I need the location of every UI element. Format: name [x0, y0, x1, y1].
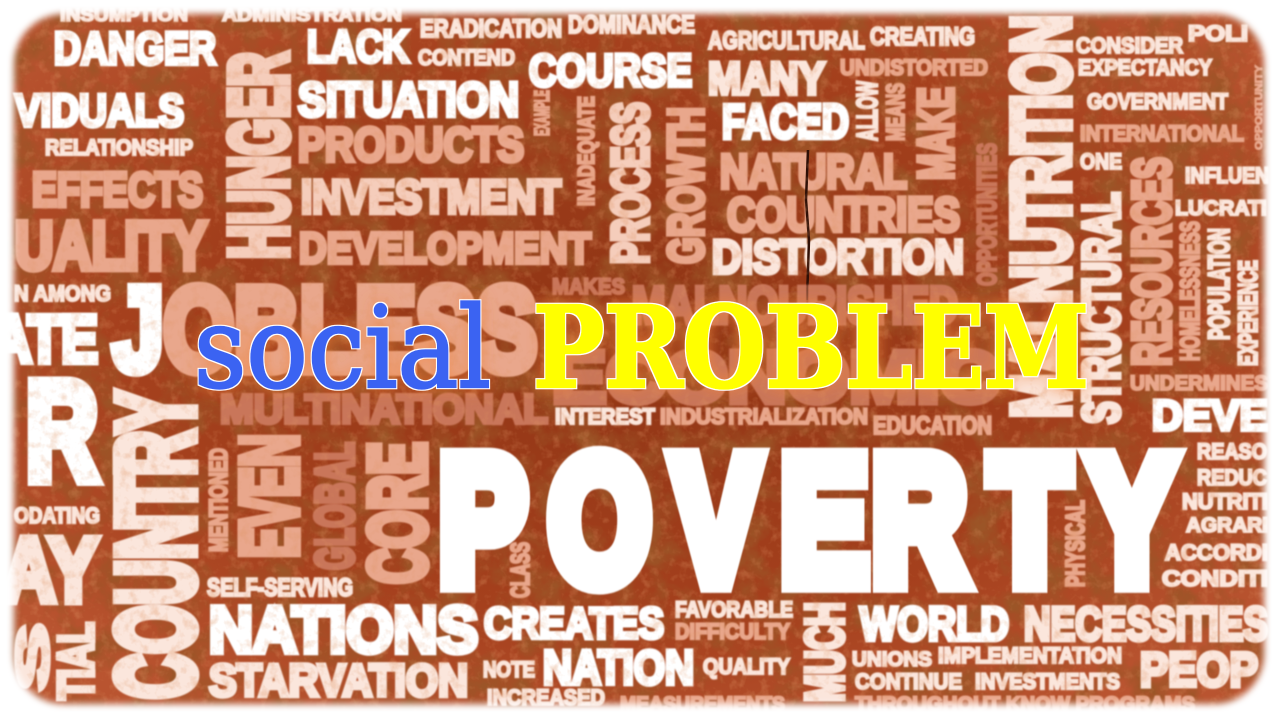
main word: POVERTY: POVERTY [440, 422, 1175, 620]
lower right words: IMPLEMENTATION [938, 643, 1122, 668]
right column words: GOVERNMENT [1087, 89, 1228, 114]
right column words: POPULATION [1203, 228, 1236, 340]
lower right words: PEOP [1140, 644, 1258, 697]
upper centre-right words: DISTORTION [712, 230, 964, 283]
right column words: CONDITI [1162, 566, 1268, 591]
upper centre-right words: ALLOW [852, 81, 884, 141]
lower left-centre words [205, 434, 535, 706]
title word: PROBLEM: PROBLEM [533, 283, 1089, 414]
right column words: AGRARI [1186, 514, 1268, 537]
upper middle words: GROWTH [658, 107, 714, 264]
left column words: UALITY [15, 208, 207, 284]
left column words: INSUMPTION [60, 5, 188, 25]
lower right words: MEASUREMENTS [620, 693, 785, 716]
upper centre-right words: FACED [722, 96, 849, 149]
left column words: DANGER [54, 23, 216, 74]
lower right words: DIFFICULTY [675, 619, 790, 644]
lower left-centre words: SELF-SERVING [207, 574, 353, 602]
right column words: EXPECTANCY [1078, 55, 1212, 80]
lower left-centre words: MENTIONED [205, 448, 233, 552]
lower left-centre words: CLASS [505, 542, 535, 598]
left column words: R [26, 354, 98, 509]
dim words behind title: ECONOMIC [552, 338, 998, 418]
lower right words: NOTE [483, 657, 535, 682]
upper middle words: PROCESS [602, 102, 660, 264]
upper centre-right words: COUNTRIES [727, 189, 960, 242]
left column words: RELATIONSHIP [45, 135, 193, 160]
lower right words: INCREASED [487, 685, 605, 710]
lower right words: CONTINUE [855, 669, 962, 694]
dim words behind title: MAKES [552, 274, 625, 299]
lower left-centre words: CORE [353, 442, 443, 584]
upper centre-right words: CREATING [870, 23, 975, 51]
right column words: DEVE [1152, 392, 1268, 440]
lower right words: PHYSICAL [1060, 500, 1090, 587]
right column words: POLI [1188, 21, 1248, 46]
right column words: LUCRATI [1175, 196, 1267, 220]
right column words: OPPORTUNITY [1254, 65, 1265, 150]
right column words: CONSIDER [1076, 33, 1183, 58]
lower left-centre words: GLOBAL [305, 442, 365, 570]
lower right words: UNIONS [852, 648, 932, 671]
right column words [996, 15, 1269, 591]
dim words behind title: INDUSTRIALIZATION [660, 404, 868, 429]
title word: social: social [194, 284, 491, 414]
dim words behind title: JOBLESS [113, 264, 537, 396]
lower left-centre words: STARVATION [209, 655, 468, 706]
upper middle words: INADEQUATE [573, 96, 599, 206]
title: social PROBLEM [194, 283, 1089, 414]
upper centre-right words [708, 23, 1002, 286]
lower left-centre words: EVEN [225, 434, 315, 558]
dim words behind title [113, 264, 998, 440]
right column words: ACCORDI [1165, 540, 1268, 565]
right column words: ONE [1080, 149, 1122, 174]
upper centre-right words: AGRICULTURAL [708, 27, 865, 55]
upper middle words: PRODUCTS [298, 119, 524, 172]
right column words: REASO [1197, 439, 1267, 464]
left column words: VIDUALS [15, 85, 184, 136]
lower right words: FAVORABLE [675, 597, 793, 622]
right column words: EXPERIENCE [1233, 260, 1263, 366]
left column words: EFFECTS [32, 164, 203, 217]
upper middle words: SITUATION [298, 74, 519, 127]
left column words: AY [2, 521, 98, 621]
upper middle words: INVESTMENT [301, 170, 561, 223]
lower right words: THROUGHOUT KNOW PROGRAMS [855, 693, 1195, 716]
left column words: COUNTRY [95, 391, 217, 699]
right column words: UNDERMINES [1130, 372, 1268, 395]
upper middle words: DOMINANCE [568, 11, 695, 39]
lower right words: QUALITY [703, 654, 790, 679]
upper centre-right words: NATURAL [720, 146, 907, 199]
dim words behind title: INTEREST [555, 404, 655, 429]
upper centre-right words: MEANS [882, 83, 910, 141]
upper middle words: COURSE [529, 45, 692, 96]
lower left-centre words: NATIONS [209, 593, 478, 666]
upper centre-right words: UNDISTORTED [840, 55, 988, 80]
right column words: HOMELESSNESS [1175, 221, 1205, 361]
lower right words: CREATES [484, 599, 664, 648]
lower right words [483, 500, 1268, 716]
left column words: TIAL [48, 622, 104, 700]
lower right words: NATION [543, 642, 694, 695]
left column words: S [7, 624, 58, 690]
lower right words: WORLD [860, 597, 1009, 650]
lower right words: INVESTMENTS [975, 669, 1120, 694]
upper centre-right words: MANY [708, 53, 825, 104]
left column words: ODATING [14, 503, 100, 528]
right column words: INTERNATIONAL [1080, 121, 1244, 146]
left column words: N AMONG [14, 281, 111, 306]
upper middle words: ADMINISTRATION [222, 5, 402, 25]
upper centre-right words: OPPORTUNITIES [972, 143, 1002, 286]
upper middle words: EXAMPLE [531, 90, 554, 136]
upper middle words: LACK [307, 21, 409, 72]
right column words: INFLUEN [1185, 163, 1269, 188]
crack line [806, 150, 809, 300]
right column words: REDUC [1197, 465, 1267, 490]
right column words: RESOURCES [1122, 157, 1182, 366]
right column words: STRUCTURAL [1073, 192, 1131, 424]
dim words behind title: EDUCATION [873, 412, 992, 440]
upper centre-right words: MAKE [908, 87, 964, 180]
dim words behind title: MALNOURISHED [632, 277, 958, 335]
upper middle words: DEVELOPMENT [299, 224, 591, 273]
upper middle words [212, 5, 714, 273]
left column words [0, 5, 217, 700]
upper middle words: ERADICATION [420, 15, 562, 43]
lower right words: MUCH [795, 602, 855, 702]
right column words: NUTRITI [1182, 489, 1268, 514]
dim words behind title: MULTINATIONAL [220, 386, 548, 432]
upper middle words: CONTEND [418, 45, 515, 70]
